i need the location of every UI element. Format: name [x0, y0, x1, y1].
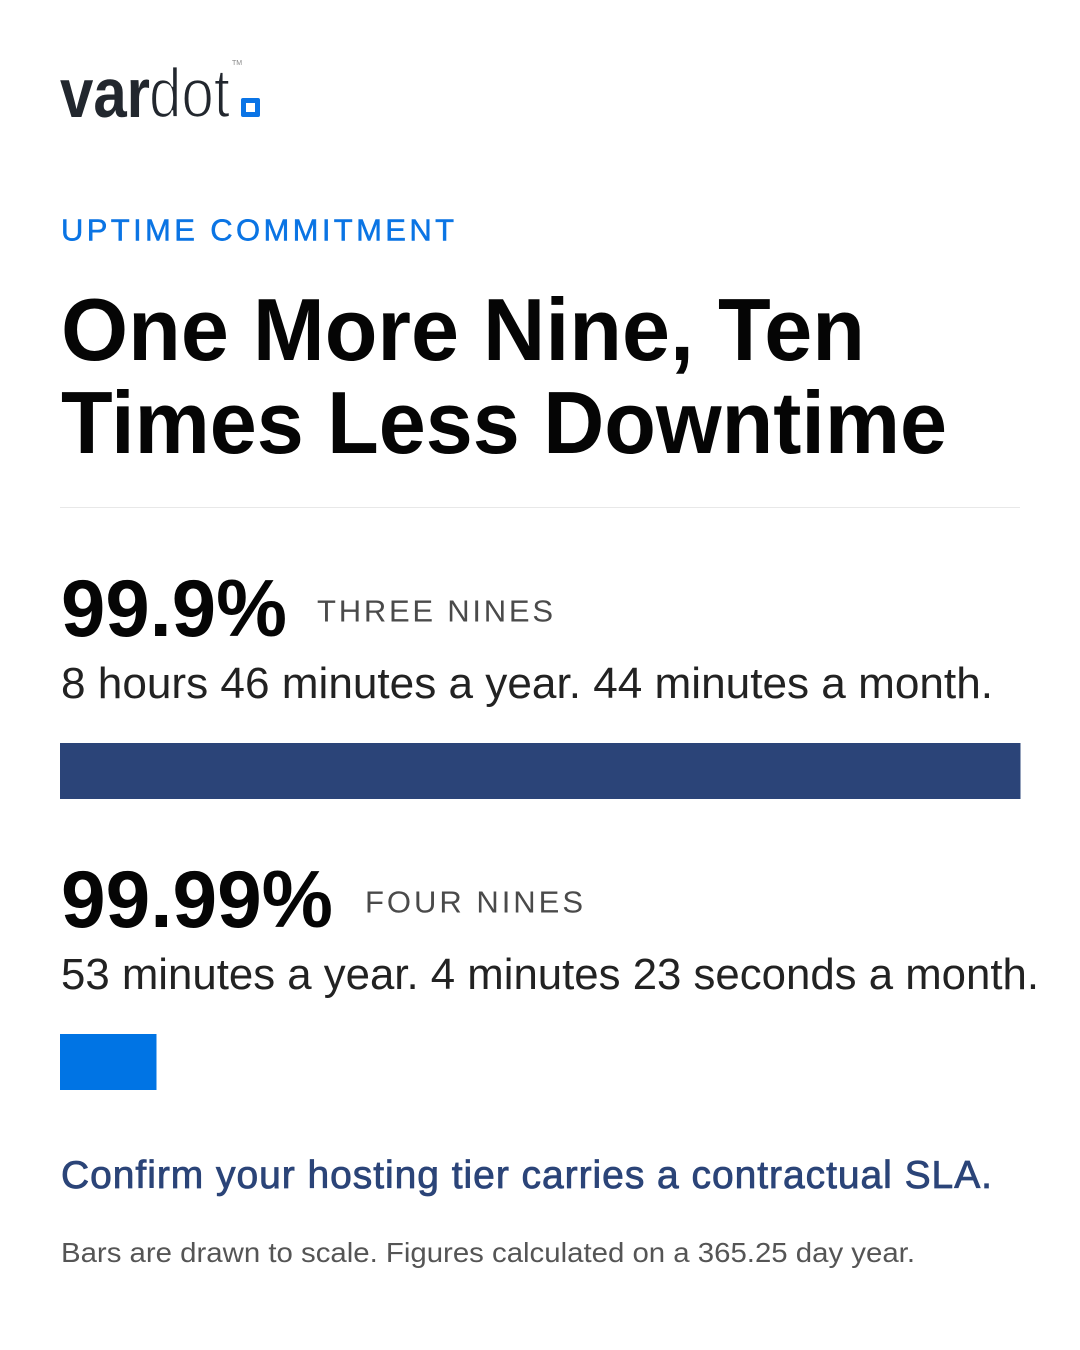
logo: vardot: [60, 54, 260, 132]
label: four nines: FOUR NINES: [365, 884, 583, 920]
panel: four nines: [60, 855, 1039, 1090]
description: four nines downtime: 53 minutes a year. 4 minutes 23 seconds a month.: [61, 950, 1039, 999]
logo: vardot: TM: [232, 60, 242, 67]
footnote: Bars are drawn to scale. Figures calculated on a 365.25 day year.: [61, 1237, 915, 1268]
title: Times Less Downtime: [61, 373, 947, 472]
bar: four nines: [60, 1034, 156, 1090]
call to action: Confirm your hosting tier carries a contractual SLA.: [61, 1154, 992, 1197]
title: [61, 280, 947, 472]
bar: three nines: [60, 743, 1020, 799]
title: One More Nine, Ten: [61, 280, 865, 379]
stat: 99.9%: 99.9%: [61, 564, 287, 654]
logo: vardot: var: [60, 54, 150, 132]
label: three nines: THREE NINES: [317, 594, 553, 628]
stat: 99.99%: 99.99%: [61, 855, 333, 945]
eyebrow: uptime commitment: UPTIME COMMITMENT: [61, 212, 454, 248]
logo: vardot: dot: [149, 54, 230, 132]
panel: three nines: [60, 564, 1020, 799]
description: three nines downtime: 8 hours 46 minutes a year. 44 minutes a month.: [61, 659, 993, 708]
